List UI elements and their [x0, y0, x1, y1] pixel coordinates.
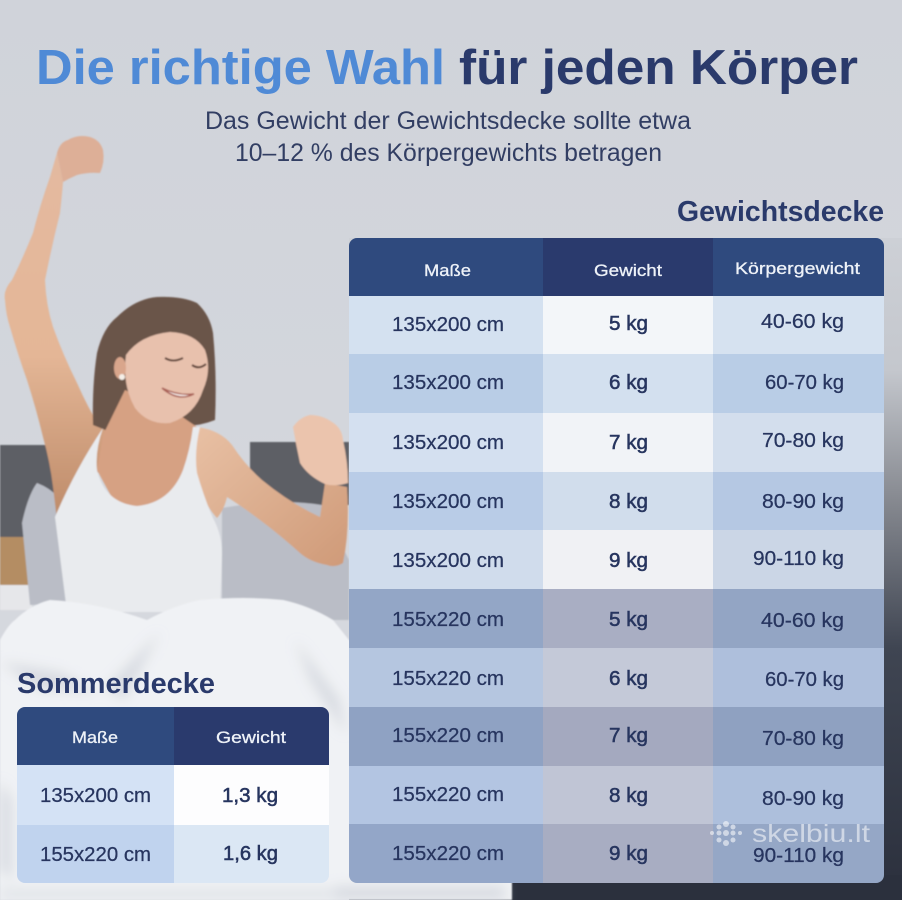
face [114, 332, 208, 423]
column: Körpergewicht: 60-70 kg [765, 669, 844, 691]
duvet folds [0, 632, 505, 900]
subtitle: Das Gewicht der Gewichtsdecke sollte etwa [205, 107, 691, 135]
column: Maße: 155x220 cm [392, 725, 504, 747]
watermark: skelbiu.lt [710, 820, 870, 848]
neck and chest [97, 390, 197, 507]
table header labels [424, 259, 860, 280]
table header labels: Körpergewicht [735, 259, 860, 278]
column: Gewicht: 8 kg [609, 491, 648, 513]
subtitle [205, 107, 691, 167]
column: Körpergewicht [753, 311, 844, 867]
raised arm [5, 153, 112, 520]
table: Gewichtsdecke [349, 238, 884, 883]
column: Maße: 155x220 cm [392, 609, 504, 631]
table header labels: Maße [424, 261, 471, 280]
column: Gewicht: 6 kg [609, 372, 648, 394]
title [36, 41, 858, 95]
heading: Gewichtsdecke: Gewichtsdecke [677, 196, 884, 228]
column: Gewicht: 8 kg [609, 785, 648, 807]
subtitle: 10–12 % des Körpergewichts betragen [235, 139, 662, 167]
column: Körpergewicht: 60-70 kg [765, 372, 844, 394]
icon: watermark dots [710, 821, 742, 846]
tank top [55, 427, 222, 612]
column: Körpergewicht: 70-80 kg [762, 728, 844, 750]
eyes [165, 358, 206, 367]
column: Körpergewicht: 70-80 kg [762, 430, 844, 452]
heading: Sommerdecke: Sommerdecke [17, 668, 215, 700]
column: Maße: 155x220 cm [392, 784, 504, 806]
column: Gewicht: 6 kg [609, 668, 648, 690]
hair back [93, 297, 216, 440]
open hand [293, 415, 348, 485]
photo: woman stretching in bed [0, 136, 512, 900]
column: Maße: 155x220 cm [392, 843, 504, 865]
earring [119, 374, 125, 380]
fist [57, 136, 104, 182]
column: Maße: 135x200 cm [392, 372, 504, 394]
table: Sommerdecke: 1,3 kg [222, 785, 278, 807]
column: Körpergewicht: 40-60 kg [761, 610, 844, 632]
pillows [22, 483, 349, 620]
title: navy part: für jeden Körper [459, 41, 858, 95]
column: Maße: 135x200 cm [392, 491, 504, 513]
table: Sommerdecke: 135x200 cm [40, 785, 151, 807]
column: Maße: 135x200 cm [392, 550, 504, 572]
table: Sommerdecke [17, 707, 329, 883]
ear [114, 357, 126, 379]
lowered arm [195, 427, 348, 566]
column: Maße: 155x220 cm [392, 668, 504, 690]
column: Körpergewicht: 80-90 kg [762, 491, 844, 513]
column: Körpergewicht: 90-110 kg [753, 548, 844, 570]
column: Körpergewicht: 90-110 kg [753, 845, 844, 867]
column: Maße: 135x200 cm [392, 314, 504, 336]
column: Gewicht: 7 kg [609, 725, 648, 747]
column: Gewicht: 5 kg [609, 609, 648, 631]
title: blue part: Die richtige Wahl [36, 41, 445, 95]
column: Gewicht: 9 kg [609, 550, 648, 572]
headboard [0, 442, 349, 537]
table: Sommerdecke: Gewicht [216, 728, 286, 747]
column: Gewicht: 9 kg [609, 843, 648, 865]
column: Gewicht: 7 kg [609, 432, 648, 454]
table: Sommerdecke: Maße [72, 728, 118, 747]
column: Körpergewicht: 40-60 kg [761, 311, 844, 333]
table header labels: Gewicht [594, 261, 662, 280]
smile [162, 388, 194, 397]
duvet [0, 598, 512, 900]
column: Körpergewicht: 80-90 kg [762, 788, 844, 810]
watermark: skelbiu.lt: skelbiu.lt [752, 820, 870, 848]
column: Gewicht: 5 kg [609, 313, 648, 335]
column: Maße: 135x200 cm [392, 432, 504, 454]
column: Maße [392, 314, 504, 865]
column: Gewicht [609, 313, 648, 865]
table: Sommerdecke: 1,6 kg [223, 843, 278, 865]
table: Sommerdecke: 155x220 cm [40, 844, 151, 866]
nightstand [0, 537, 32, 610]
